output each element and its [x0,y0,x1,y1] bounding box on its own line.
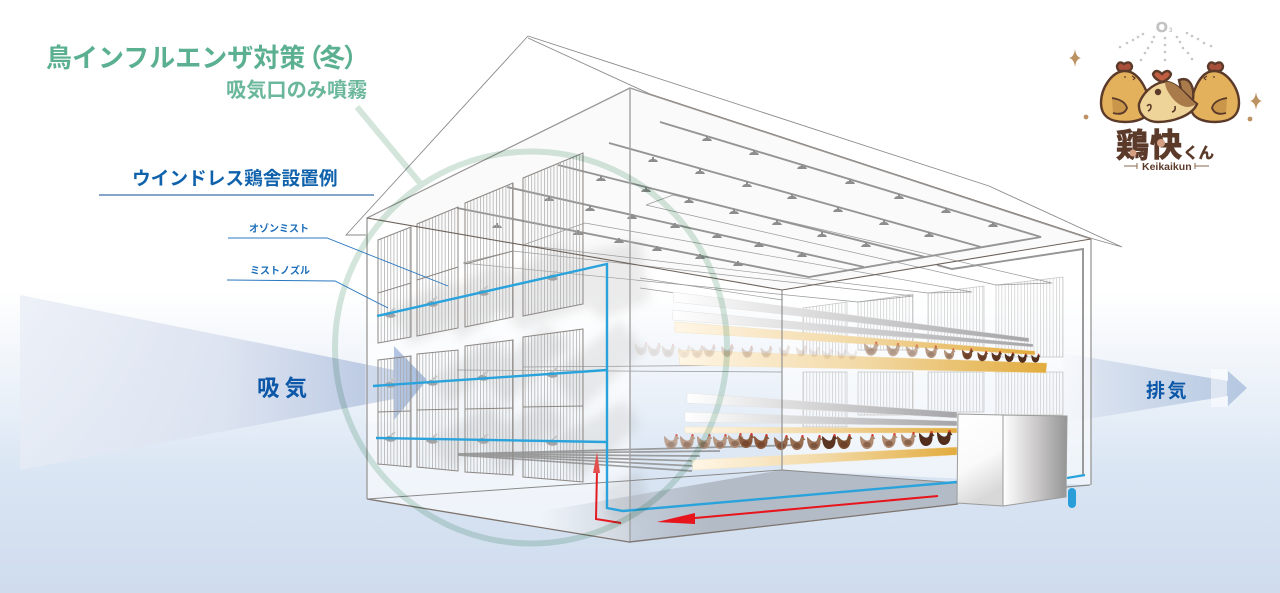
back wall cages [803,277,1063,427]
logo wordmark [1116,127,1214,173]
logo wordmark: 鶏 [1116,127,1149,164]
intake label: 吸気 [257,376,312,401]
blue water pipes [373,264,1085,511]
air conditioning unit [957,414,1067,506]
logo: Keikaikun [1069,19,1262,173]
thin shelf lines [457,195,1052,372]
callout: mist nozzle: ミストノズル [250,264,310,277]
house walls and floor [367,88,1091,543]
air intake arrow [20,295,427,470]
callout: ozone mist: オゾンミスト [249,223,309,235]
subtitle: 吸気口のみ噴霧 [226,79,367,102]
left chick [1101,62,1150,122]
ozone mist clouds [390,240,650,525]
ozone spray dots: 3 [1169,28,1173,34]
lower feed troughs [685,393,957,470]
wall mist nozzles [384,271,558,446]
left wall cages [378,153,583,482]
callout: mist nozzle [227,264,388,308]
poultry house [20,36,1122,543]
water outlet [1068,488,1076,508]
ozone spray dots [1119,19,1212,61]
callout: ozone mist [228,223,448,286]
section heading with rule: ウインドレス鶏舎設置例 [132,168,338,189]
exhaust arrow [1063,353,1247,423]
sparkles [1069,49,1262,121]
upper feed troughs [672,292,1047,373]
hens lower row [664,430,952,450]
logo wordmark: くん [1183,144,1214,162]
logo wordmark: 快 [1150,127,1182,163]
ozone spray dots: O [1156,19,1168,36]
hens upper row [635,341,1040,363]
house frame and roof [346,36,1122,543]
ceiling mist pipes with nozzles [457,122,1083,475]
floor grid lines [458,445,800,471]
title: 鳥インフルエンザ対策（冬） [46,43,369,73]
exhaust label: 排気 [1146,380,1189,402]
centre hen [1139,71,1197,122]
right chick [1191,62,1239,122]
logo wordmark: Keikaikun [1142,161,1192,173]
red air flow arrows [593,452,938,524]
green highlight circle with stem [335,107,727,544]
